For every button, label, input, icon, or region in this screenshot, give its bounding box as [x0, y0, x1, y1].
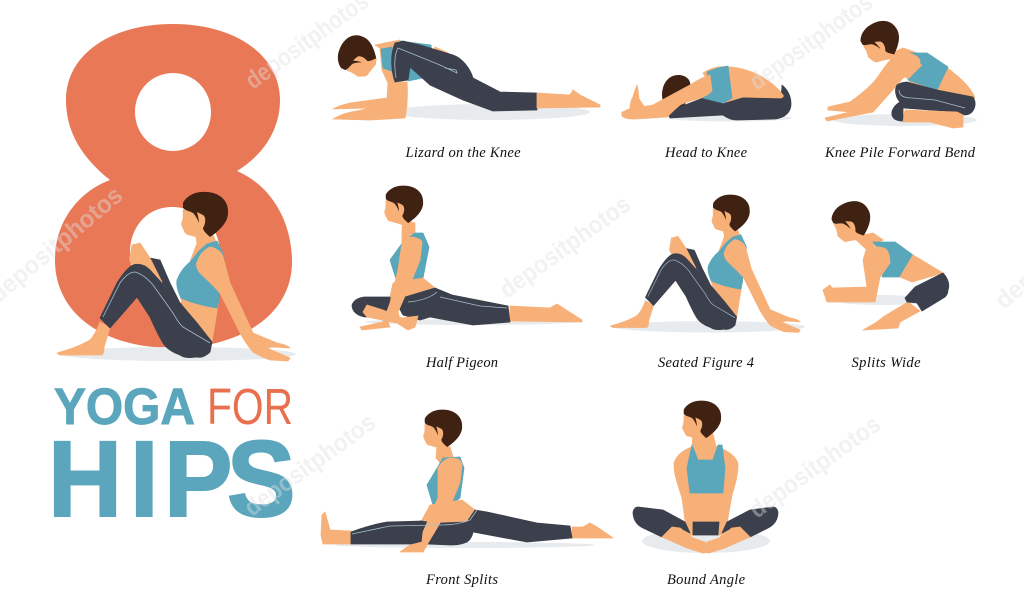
label: Bound Angle — [667, 572, 746, 588]
label: Front Splits — [425, 572, 498, 588]
label: Half Pigeon — [425, 355, 498, 371]
big number 8 — [55, 24, 292, 348]
figure: front splits — [321, 410, 613, 552]
figure: knee pile forward bend — [825, 15, 977, 128]
watermark: depositphotos — [744, 410, 886, 524]
figure: bound angle — [633, 401, 778, 553]
label: Seated Figure 4 — [658, 355, 754, 371]
label: Lizard on the Knee — [404, 145, 521, 161]
watermark: depositphotos — [239, 408, 381, 522]
label: Knee Pile Forward Bend — [824, 145, 976, 161]
title word: HIPS: HIPS — [48, 420, 295, 540]
title: yoga for hips — [48, 378, 295, 540]
figure: half pigeon — [352, 186, 582, 330]
figure: lizard on the knee — [333, 30, 600, 120]
label: Head to Knee — [664, 145, 748, 161]
figure: splits wide — [823, 195, 949, 330]
title word: YOGA: YOGA — [54, 378, 195, 435]
figure: seated figure 4 — [610, 195, 805, 332]
figure: head to knee — [622, 66, 792, 122]
label: Splits Wide — [852, 355, 921, 371]
watermark: depositphotos — [494, 190, 636, 304]
title word: FOR: FOR — [207, 378, 293, 435]
figure: main seated pose — [57, 192, 296, 361]
